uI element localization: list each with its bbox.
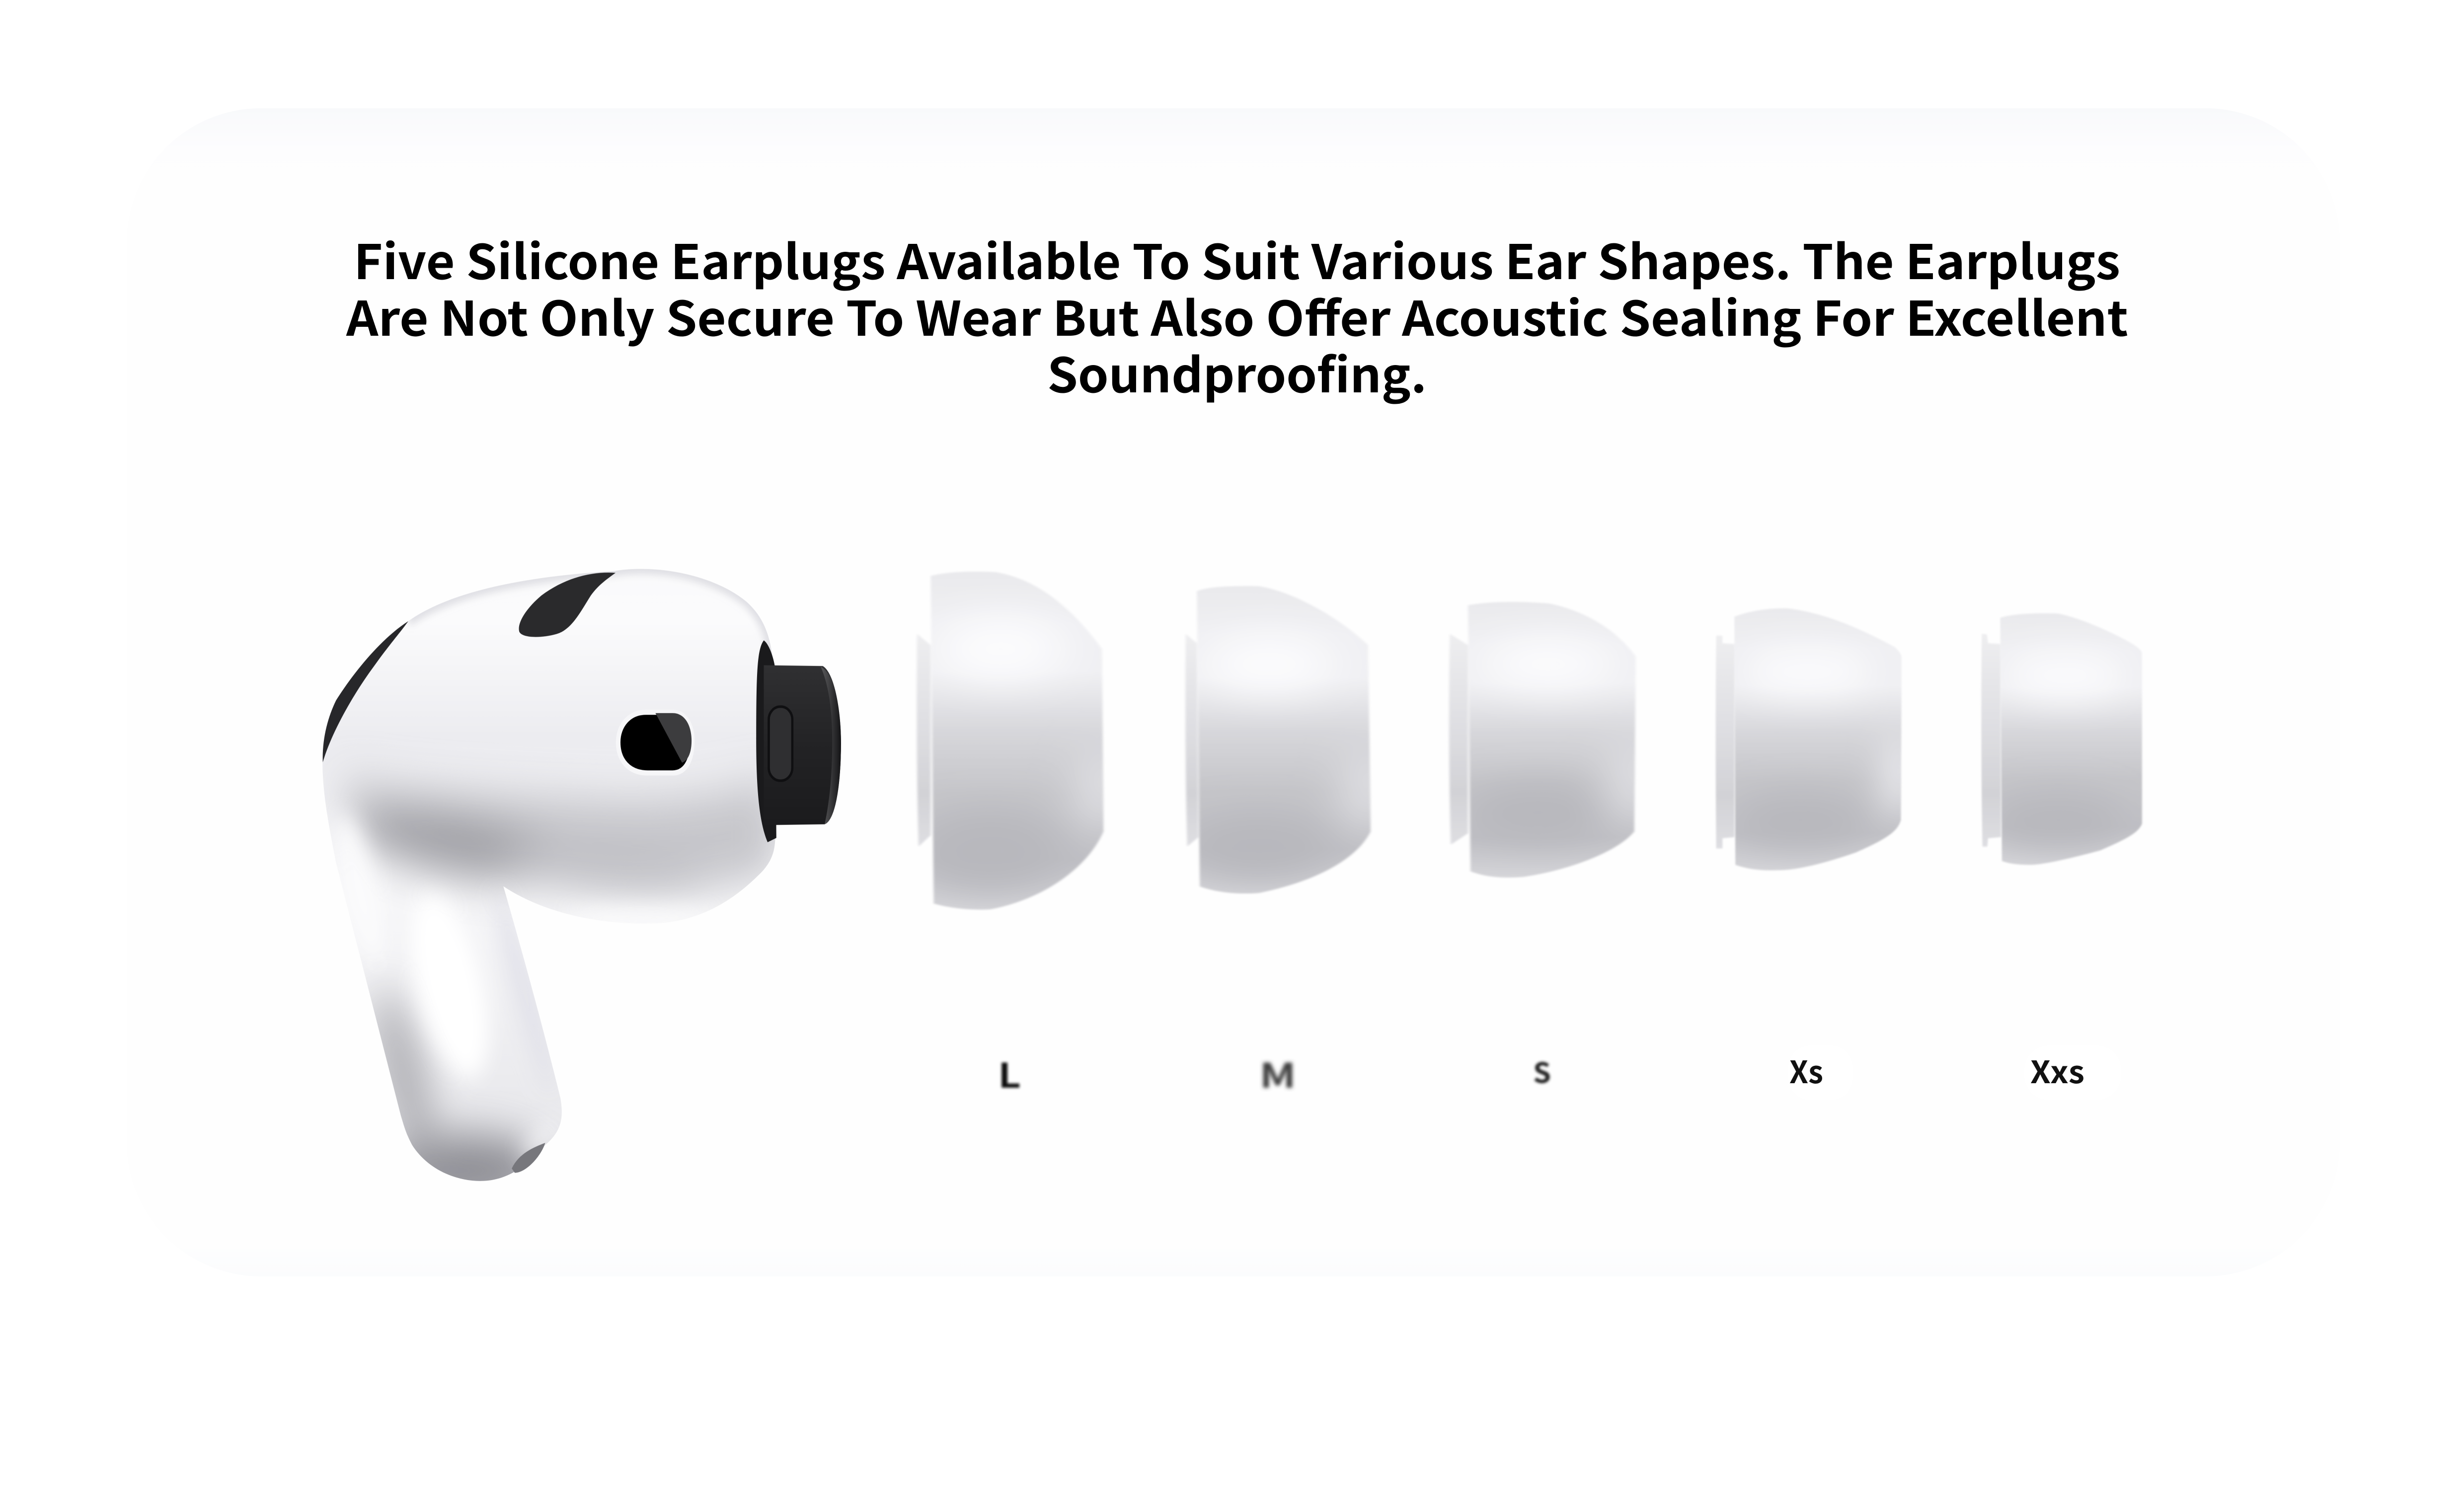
title xyxy=(346,224,2128,406)
size label: Xs xyxy=(1788,1045,1853,1100)
earbud body xyxy=(313,559,785,1207)
size label: Xxs: Xxs xyxy=(2030,1047,2084,1092)
icon: earbud xyxy=(313,559,841,1207)
icon: earplug M xyxy=(1183,585,1388,896)
size label: S: S xyxy=(1533,1051,1551,1091)
earbud rear dark vent xyxy=(323,621,408,762)
panel: rounded card xyxy=(127,108,2340,1276)
size label: L: L xyxy=(998,1048,1021,1098)
size label: M: M xyxy=(1259,1048,1296,1098)
earbud nozzle xyxy=(756,640,841,842)
earbud bottom microphone xyxy=(512,1143,545,1173)
icon: earplug Xxs xyxy=(1981,611,2143,866)
icon: earplug Xs xyxy=(1716,605,1916,873)
size label: Xxs xyxy=(2024,1045,2121,1100)
title: Five Silicone Earplugs Available To Suit Various Ear Shapes. The Earplugs xyxy=(354,224,2120,293)
icon: earplug L xyxy=(915,569,1122,911)
icon: earplug S xyxy=(1449,599,1655,879)
earbud top vent xyxy=(519,573,616,637)
earbud sensor window xyxy=(618,712,693,773)
title: Are Not Only Secure To Wear But Also Offer Acoustic Sealing For Excellent xyxy=(346,281,2128,350)
size label: Xs: Xs xyxy=(1789,1047,1823,1092)
title: Soundproofing. xyxy=(1047,337,1427,406)
